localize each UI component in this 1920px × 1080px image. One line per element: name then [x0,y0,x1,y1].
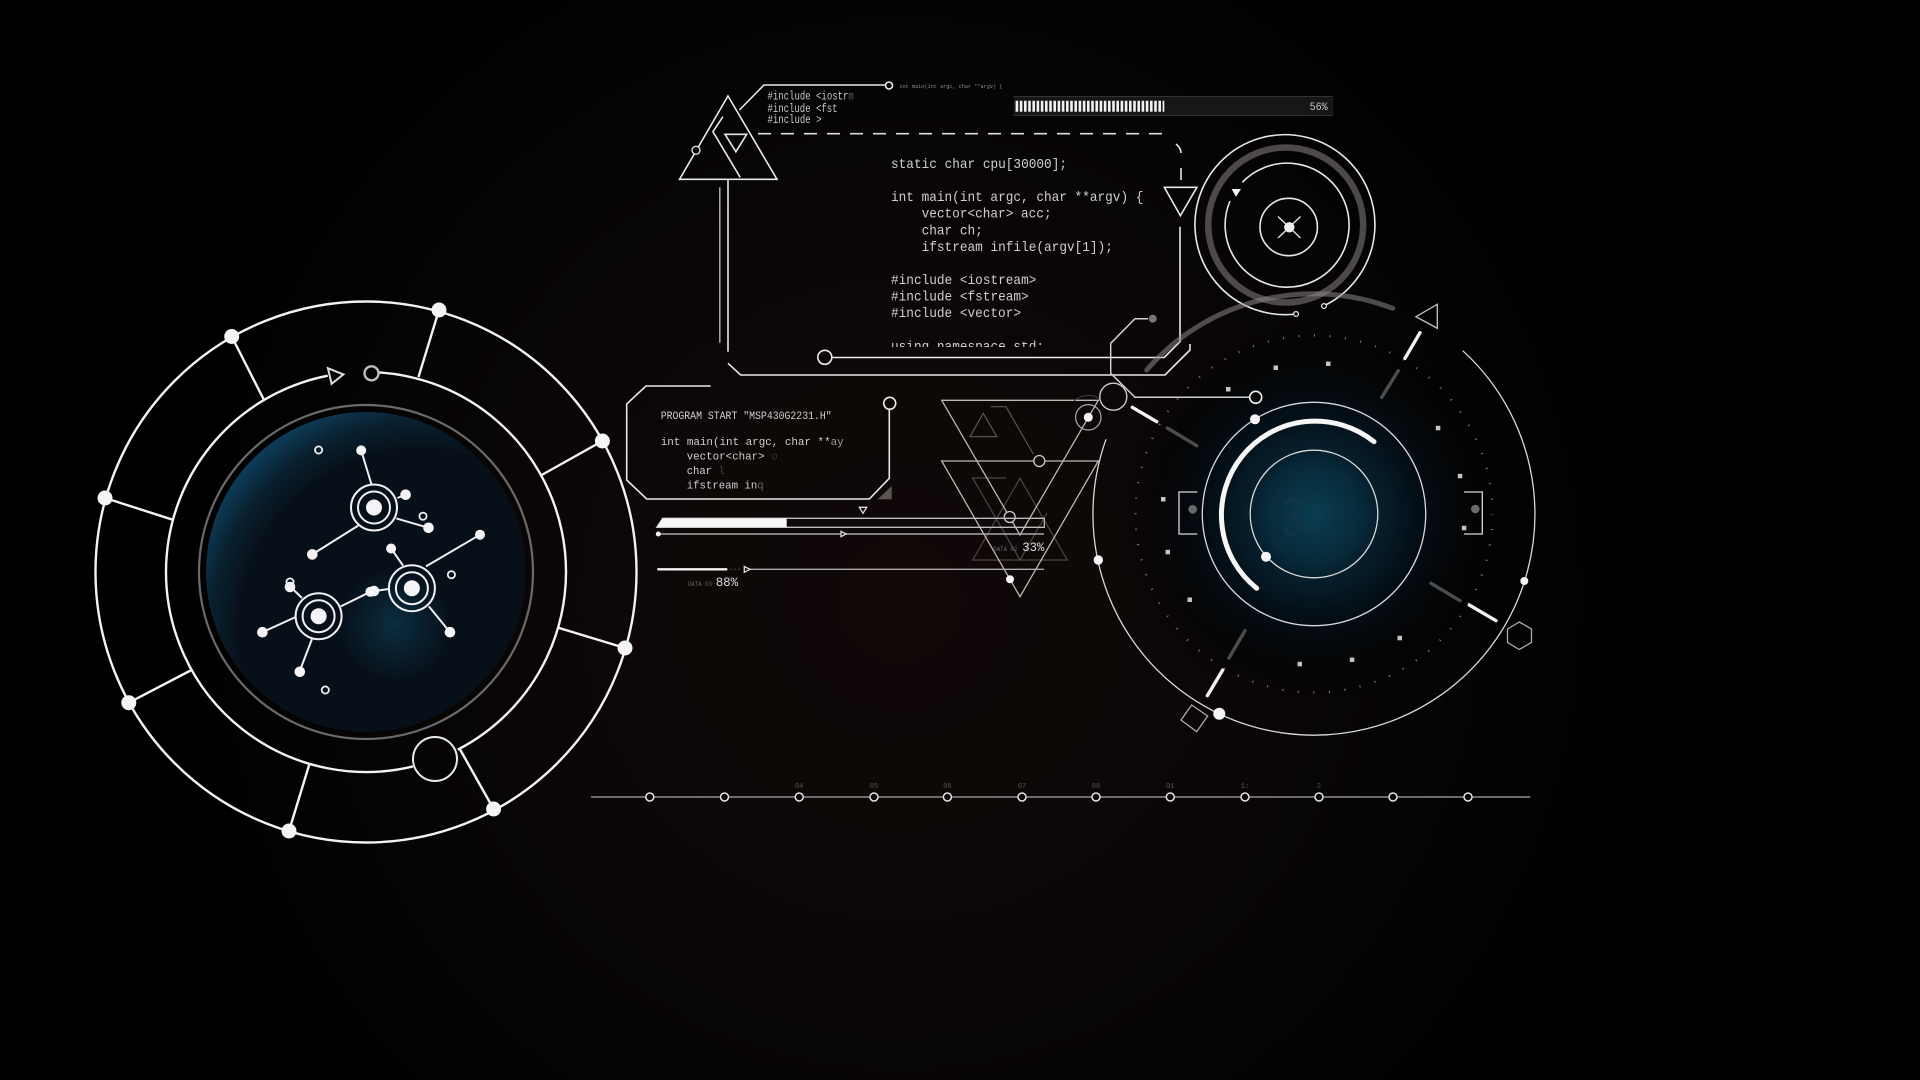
icon: cross [1278,216,1300,238]
bar one track [656,531,1044,537]
panel: right radar dial [1093,294,1535,735]
gray tick marks [1167,371,1460,658]
inner ring [166,372,566,772]
dashed window frame [754,133,1167,135]
tiny code caption: int main(int argc, char **argv) { [899,84,1002,90]
icon: window node circle [818,350,832,364]
inner ring [1250,450,1378,578]
icon: ring start circle [364,366,378,380]
timeline labels: 01 [1166,783,1175,791]
main code text: #include <iostream> [891,273,1036,289]
inner circle [1260,198,1317,256]
thick arc [1221,421,1374,588]
data 02 label: 33% [1022,540,1044,555]
target node [1074,395,1101,430]
large inverted triangle upper [942,400,1098,535]
main code text: static char cpu[30000]; [891,157,1067,173]
frame corner [1176,144,1181,180]
main code text: #include <vector> [891,306,1021,322]
icon: hexagon [1508,622,1532,650]
ring spokes [105,310,625,831]
arc end nodes [1294,304,1326,316]
bracket dots [1188,505,1480,514]
molecule network [257,445,485,694]
window frame lines [720,180,1190,375]
outer arc [1195,135,1375,315]
timeline labels: 04 [795,783,803,791]
include text block [768,90,854,127]
circuit connector [1111,315,1262,403]
timeline labels: 08 [1092,783,1100,791]
middle ring [1202,402,1426,626]
disc rim [199,405,533,739]
outer ring [96,302,636,842]
panel: left molecule dial [96,302,636,842]
include text block: #include <fst [768,103,838,116]
terminal code text: PROGRAM START "MSP430G2231.H" [661,411,832,423]
progress bar 56%: 56% [1310,102,1328,114]
icon: diamond [1181,705,1208,732]
main code text: ifstream infile(argv[1]); [922,240,1113,256]
ring dots [1094,414,1528,720]
main code text: using namespace std; [891,340,1044,356]
white tick marks [1132,333,1496,696]
terminal code text [661,411,844,492]
icon: inverted triangle [1164,187,1197,216]
timeline labels: 07 [1018,783,1026,791]
brackets [1179,492,1482,534]
satellite atoms [257,445,485,677]
panel: timeline [591,783,1530,801]
main code text: int main(int argc, char **argv) { [891,190,1143,206]
data 03 label: DATA 03 [688,581,712,588]
main code text [891,157,1143,356]
molecule hub B [389,565,435,611]
large inverted triangle lower [942,461,1098,597]
timeline labels [795,783,1321,791]
panel: triangle cluster [942,383,1127,597]
timeline labels: 06 [943,783,952,791]
main code text: vector<char> acc; [922,207,1052,223]
bar two [657,566,1044,572]
molecule hub A [351,484,397,530]
data 03 label: 88% [716,575,738,590]
panel: top code window [680,82,1333,403]
bonds [262,450,480,672]
icon: terminal node [884,397,896,409]
outer arc [1093,351,1535,735]
icon: arc marker [1232,189,1241,197]
data 02 label: DATA 02 [993,546,1017,553]
icon: corner wedge [878,486,892,499]
glass disc [206,412,526,732]
panel: program start terminal [627,386,896,499]
triangle nodes [1004,456,1045,583]
icon: big triangle [680,96,777,179]
molecule hub C [296,593,342,639]
small ring atoms [286,446,455,694]
tick ring [1136,336,1492,692]
icon: ring arrow [328,368,343,384]
include text block: #include <iostrm [768,90,854,104]
timeline axis [591,796,1530,798]
connector line with node [739,82,892,110]
icon: triangle [1416,304,1437,328]
timeline labels: 1: [1241,783,1249,791]
inner arc [1225,163,1349,287]
terminal code text: char l [687,466,725,478]
bar one [657,518,1044,527]
outer ring nodes [98,302,632,838]
data 02 label [993,540,1044,555]
terminal frame [627,386,889,499]
gray top arc [1147,294,1393,370]
icon: large ring circle [413,737,457,781]
main code text: char ch; [922,223,983,239]
progress bar 56% [1013,96,1333,116]
connector circle [1100,383,1127,410]
data 03 label [688,575,738,590]
timeline nodes [646,793,1472,801]
panel: target dial top right [1195,135,1375,316]
panel: progress bars [656,507,1044,590]
terminal code text: vector<char> o [687,452,778,464]
icon: bar marker [859,507,867,513]
include text block: #include > [768,114,822,127]
terminal code text: int main(int argc, char **ay [661,437,844,449]
disc glow [337,567,453,683]
gray ring [1208,148,1363,302]
terminal code text: ifstream inq [687,480,764,492]
timeline labels: 05 [870,783,878,791]
main code text: #include <fstream> [891,290,1029,306]
square dots ring [1161,362,1466,666]
faint digit: 3 [1281,489,1303,554]
faint triangles [970,407,1067,560]
radar glow [1124,324,1504,704]
timeline labels: 2 [1317,783,1321,791]
